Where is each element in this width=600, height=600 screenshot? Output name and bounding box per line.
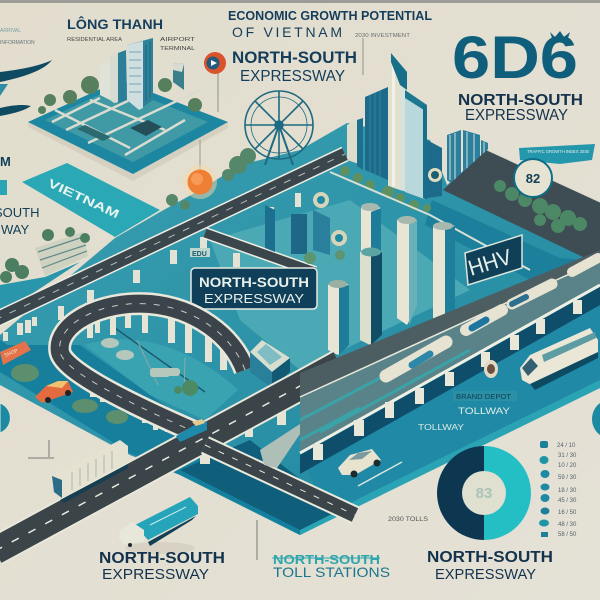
label box: North-South Expressway <box>191 268 317 309</box>
left shop, shrubs and red car <box>0 341 128 424</box>
legend: 16 / 50 <box>558 510 577 516</box>
legend: 48 / 30 <box>558 522 577 528</box>
panel: Long Thanh city platform <box>28 38 228 181</box>
left cropped labels <box>0 28 40 237</box>
heading: Long Thanh: LÔNG THANH <box>67 15 163 32</box>
icon: white bus <box>520 328 598 390</box>
callout: top right strip: TRAFFIC GROWTH INDEX 2030 <box>527 149 589 154</box>
ground marks <box>28 440 257 560</box>
icon: white car <box>338 449 402 486</box>
badge: 82: 82 <box>526 171 540 186</box>
legend: 24 / 10 <box>557 443 576 449</box>
big number 6D6: 6D6 <box>452 24 578 91</box>
label: North-South Expressway bottom right: EXPRESSWAY <box>435 566 536 583</box>
district towers <box>265 205 345 264</box>
title: NORTH-SOUTH <box>232 48 357 67</box>
label: North-South Expressway bottom left: NORTH-SOUTH <box>99 550 225 567</box>
heading: Long Thanh: TERMINAL <box>160 46 195 52</box>
building with trees lower left <box>0 227 90 315</box>
label: toll stations: NORTH-SOUTH <box>273 552 380 567</box>
label box: North-South Expressway: NORTH-SOUTH <box>199 274 309 290</box>
legend: 10 / 20 <box>558 463 577 469</box>
legend <box>539 441 577 538</box>
title: OF VIETNAM <box>232 24 342 40</box>
left edge ring fragment <box>0 403 10 433</box>
icon: red car <box>35 381 73 403</box>
badge: 82 <box>514 159 552 197</box>
heading: Long Thanh <box>67 15 196 52</box>
toll marker <box>484 360 498 378</box>
left shop, shrubs and red car: SHOP <box>4 348 20 359</box>
label: North-South Expressway upper right: NORTH-SOUTH <box>458 92 583 109</box>
cross road <box>205 445 355 515</box>
legend: 45 / 30 <box>558 498 577 504</box>
banner: Vietnam <box>22 163 160 237</box>
road labels: TOLLWAY <box>418 422 464 432</box>
toll building <box>250 340 290 388</box>
loop ramp road <box>60 304 245 432</box>
label: North-South Expressway upper right: EXPRESSWAY <box>465 107 568 124</box>
donut chart: 83 <box>476 485 492 502</box>
icon: blue van <box>176 419 207 442</box>
banner: Vietnam: VIETNAM <box>46 176 121 221</box>
trees right <box>494 180 587 233</box>
hedge row <box>340 166 431 212</box>
right road <box>425 150 600 285</box>
left cropped labels: M <box>0 154 11 169</box>
trains on viaduct <box>386 258 598 376</box>
road labels <box>418 391 517 432</box>
donut chart <box>437 446 531 540</box>
central skyscrapers <box>347 53 488 200</box>
teal ground platform <box>0 123 600 535</box>
road labels: TOLLWAY <box>458 406 510 416</box>
legend: 31 / 30 <box>558 453 577 459</box>
pillar towers <box>328 203 455 355</box>
small caption: 2030 TOLLS <box>388 517 428 523</box>
icon: airplane <box>0 60 52 116</box>
second road <box>190 233 315 272</box>
icon: white truck <box>52 440 128 503</box>
callout: top right strip <box>519 144 595 164</box>
title: ECONOMIC GROWTH POTENTIAL <box>228 9 432 23</box>
title <box>228 9 432 85</box>
label: toll stations: TOLL STATIONS <box>273 564 390 580</box>
pin: red marker <box>204 52 226 112</box>
label: toll stations <box>272 552 390 580</box>
title: EXPRESSWAY <box>240 68 345 85</box>
trees near ferris wheel <box>166 148 256 210</box>
label: North-South Expressway bottom right <box>427 549 553 583</box>
left cropped labels: WAY <box>1 222 29 237</box>
upper expressway <box>0 154 345 341</box>
right edge donut fragment <box>592 403 600 435</box>
small ring markers <box>313 192 347 246</box>
heading: Long Thanh: AIRPORT <box>160 37 196 43</box>
central block edge <box>330 172 530 270</box>
viaduct rail <box>260 250 600 474</box>
label: North-South Expressway upper right <box>458 92 583 124</box>
label: North-South Expressway bottom left <box>99 550 225 583</box>
title: 2030 INVESTMENT <box>355 33 410 39</box>
label: North-South Expressway bottom left: EXPRESSWAY <box>102 566 209 583</box>
left cropped labels: INFORMATION <box>0 40 35 46</box>
label: North-South Expressway bottom right: NORTH-SOUTH <box>427 549 553 566</box>
sign: HHV: HHV <box>465 244 515 281</box>
legend: 59 / 30 <box>558 475 577 481</box>
lower main road <box>0 364 340 551</box>
left cropped labels: ARRIVAL <box>0 28 21 34</box>
sign: HHV <box>465 235 522 285</box>
orange sun marker <box>183 140 217 199</box>
heading: Long Thanh: RESIDENTIAL AREA <box>67 37 122 43</box>
loop ramp interior <box>85 328 238 420</box>
road labels: BRAND DEPOT <box>456 394 512 401</box>
second road: EDU <box>192 251 207 258</box>
ferris wheel <box>245 91 313 165</box>
legend: 18 / 30 <box>558 488 577 494</box>
tower: main <box>127 38 153 110</box>
legend: 58 / 50 <box>558 532 577 538</box>
icon: blue truck <box>119 497 198 554</box>
label box: North-South Expressway: EXPRESSWAY <box>204 291 304 306</box>
loop ramp pillars <box>87 312 286 464</box>
